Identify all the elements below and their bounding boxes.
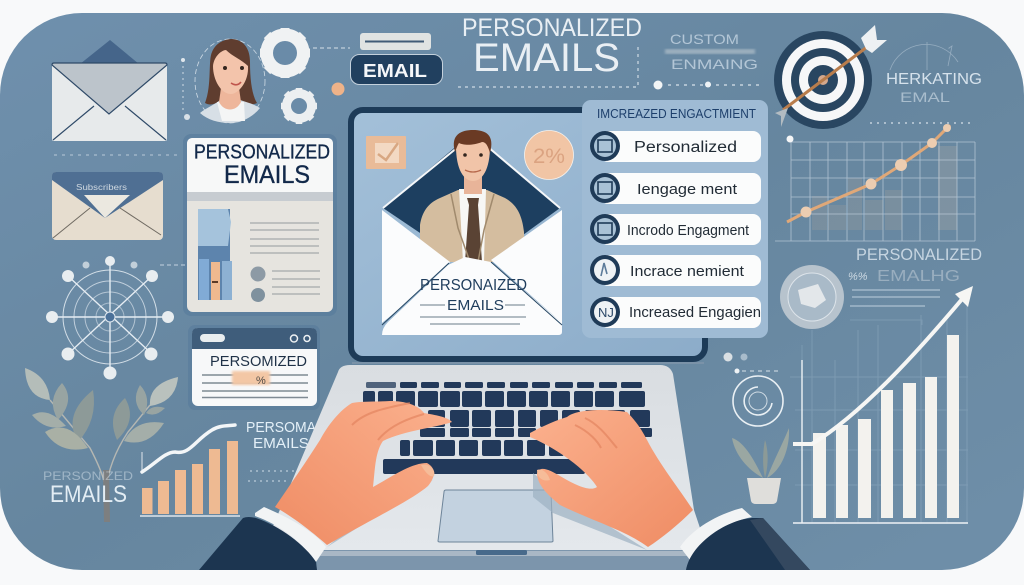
envelope back [383, 133, 560, 270]
orange check icon [366, 136, 406, 169]
icon: potted plant [732, 428, 789, 504]
right hand [530, 410, 693, 547]
card: persomized browser window: PERSOMIZED [210, 353, 307, 370]
title: personalized emails: PERSONALIZED [462, 14, 642, 42]
text: persona emails: EMAILS [253, 435, 309, 452]
right sleeve and cuff [680, 508, 810, 570]
icon: concentric clock [733, 376, 783, 426]
text: personalized emails faded: EMALHG [877, 268, 960, 285]
text: custom engaging: ENMAING [671, 56, 758, 72]
row 1 [590, 131, 761, 162]
icon: open envelope [52, 40, 167, 141]
laptop screen [351, 110, 705, 363]
icon: gray dial [780, 265, 844, 329]
envelope text [420, 277, 527, 314]
latch [476, 550, 527, 555]
button: email [350, 54, 442, 84]
button: email: EMAIL [363, 61, 427, 81]
envelope text: EMAILS [447, 297, 504, 314]
small label pill [360, 33, 431, 50]
text: personalized emails faded: PERSONALIZED [856, 245, 982, 264]
touchpad [438, 490, 553, 542]
target with arrow [774, 25, 887, 129]
panel: increased engagement [582, 100, 768, 338]
text: custom engaging [665, 31, 758, 72]
title: personalized emails [462, 14, 642, 80]
card: persomized browser window [188, 325, 320, 410]
icon: beige envelope [52, 172, 163, 240]
row 1: Personalized [634, 139, 737, 156]
panel heading: IMCREAZED ENGACTMIENT [597, 107, 756, 121]
icon: woman portrait [195, 39, 265, 123]
icon: network radar [46, 256, 174, 380]
left sleeve and cuff [199, 507, 326, 570]
text: personalized emails faded: %% [848, 271, 868, 283]
title: personalized emails: EMAILS [473, 36, 620, 80]
card heading: PERSONALIZED [194, 142, 330, 164]
row 2: Iengage ment [637, 181, 738, 198]
text: marketing email with faded dial: EMAL [900, 89, 950, 105]
card: persomized browser window: % [256, 375, 266, 387]
card text lines [250, 223, 320, 294]
row 2 [590, 173, 761, 204]
text: personized emails [43, 469, 133, 508]
row 5: Increased Engagien [629, 304, 761, 321]
card: personalized emails document [183, 134, 337, 316]
chart: small orange bars [140, 425, 240, 516]
laptop base with keyboard [262, 365, 708, 570]
row 5: NJ [598, 305, 614, 320]
line chart on grid [775, 123, 975, 241]
decorative orange dot [332, 82, 344, 96]
icon: leafy plant [25, 368, 178, 522]
card image with bars [198, 209, 232, 300]
text: personalized emails faded [848, 245, 982, 306]
row 5 [590, 297, 761, 328]
left hand [275, 401, 452, 545]
text: persona emails [246, 419, 316, 452]
percent badge [524, 130, 574, 180]
text: personized emails: EMAILS [50, 481, 127, 508]
keyboard keys [363, 382, 652, 474]
envelope front [382, 210, 562, 335]
text: custom engaging: CUSTOM [670, 31, 739, 47]
text: personized emails: PERSONIZED [43, 469, 133, 483]
man in suit [420, 130, 524, 262]
row 3: Incrodo Engagment [627, 222, 750, 239]
icon: small gear [281, 88, 317, 124]
text: marketing email with faded dial [886, 42, 982, 105]
hand shadows [327, 473, 647, 550]
icon: large gear [260, 28, 310, 78]
card heading: EMAILS [224, 161, 310, 189]
text: persona emails: PERSOMA [246, 419, 316, 436]
bar chart with rising arrow [790, 286, 973, 523]
row 4: Incrace nemient [630, 263, 745, 280]
envelope text: PERSONAIZED [420, 277, 527, 294]
row 3 [590, 214, 761, 245]
percent badge: 2% [533, 145, 565, 168]
card heading [194, 142, 330, 189]
row 4 [590, 255, 761, 286]
icon: beige envelope: Subscribers [76, 183, 127, 192]
text: marketing email with faded dial: HERKATING [886, 71, 982, 88]
